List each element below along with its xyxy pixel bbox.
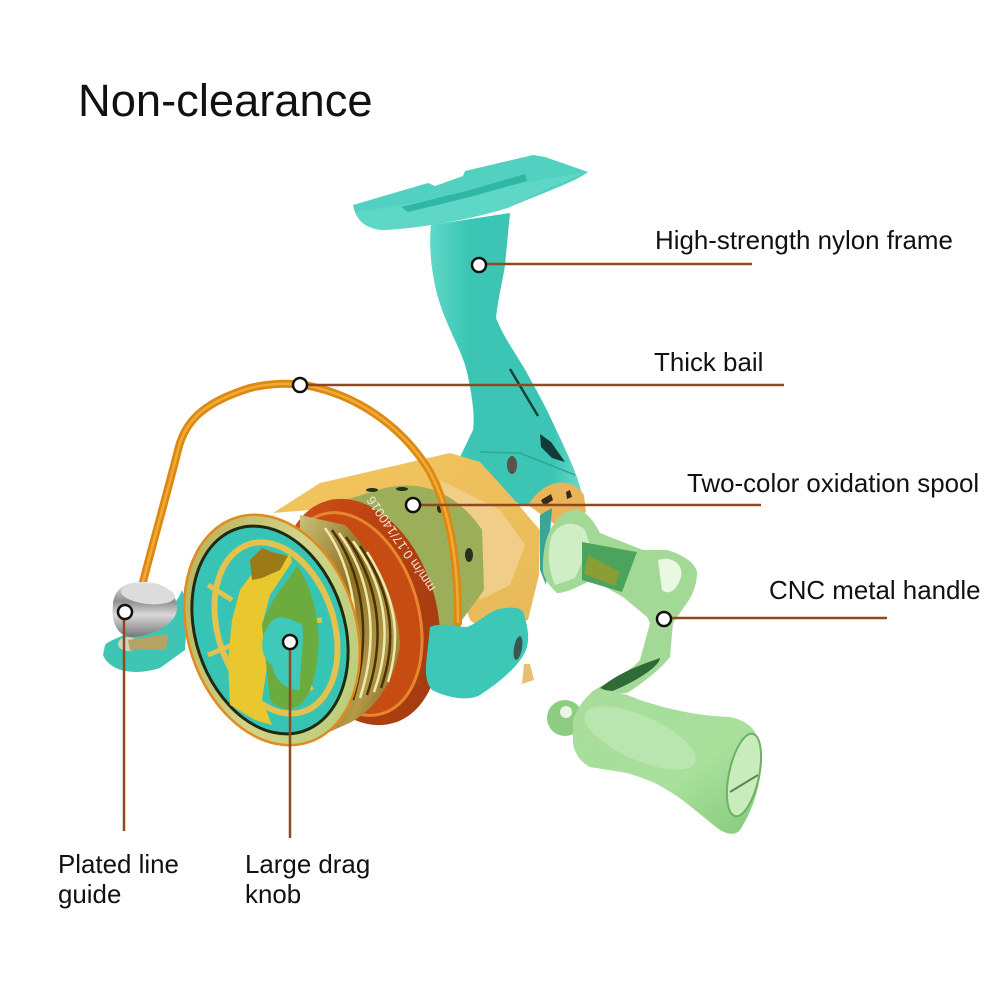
callout: Large drag knob: Large drag xyxy=(245,851,370,879)
callout: Thick bail: Thick bail xyxy=(654,349,763,377)
callout: High-strength nylon frame: High-strength nylon frame xyxy=(655,227,953,255)
frame: teal nylon stem and foot xyxy=(353,155,588,505)
teal drag knob xyxy=(262,617,303,690)
callout: Large drag knob xyxy=(245,635,370,909)
gold body xyxy=(273,453,540,628)
callout: Plated line guide: guide xyxy=(58,881,121,909)
callout: Two-color oxidation spool xyxy=(406,470,979,512)
handle end ball xyxy=(547,700,583,736)
gold star spokes xyxy=(208,585,322,690)
callout: Two-color oxidation spool: Two-color oxidation spool xyxy=(687,470,979,498)
reel illustration xyxy=(103,155,767,834)
spool label text band: mm/m 0.17/140016 xyxy=(363,493,438,595)
gold clicker plate xyxy=(228,555,292,725)
teal bail mount xyxy=(426,608,528,698)
line guide roller xyxy=(103,581,188,672)
gear housing xyxy=(528,482,586,528)
handle base and shaft xyxy=(540,508,552,585)
callout: CNC metal handle: CNC metal handle xyxy=(769,577,981,605)
spool front: drag knob face xyxy=(156,492,388,768)
handle xyxy=(540,508,767,834)
spool rear drum xyxy=(345,485,484,650)
spool: red rear flange xyxy=(253,479,467,745)
callout: High-strength nylon frame xyxy=(472,227,953,272)
small gold tab under mount xyxy=(522,664,534,684)
spool: ribbed line barrel xyxy=(300,515,400,745)
callout: Plated line guide: Plated line xyxy=(58,851,179,879)
callout: Thick bail xyxy=(293,349,784,392)
title: Non-clearance xyxy=(78,75,373,126)
callout: Plated line guide xyxy=(58,605,179,909)
callout: Large drag knob: knob xyxy=(245,881,301,909)
callout: CNC metal handle xyxy=(657,577,981,626)
bail arm xyxy=(143,384,458,623)
handle grip knob xyxy=(573,690,761,834)
